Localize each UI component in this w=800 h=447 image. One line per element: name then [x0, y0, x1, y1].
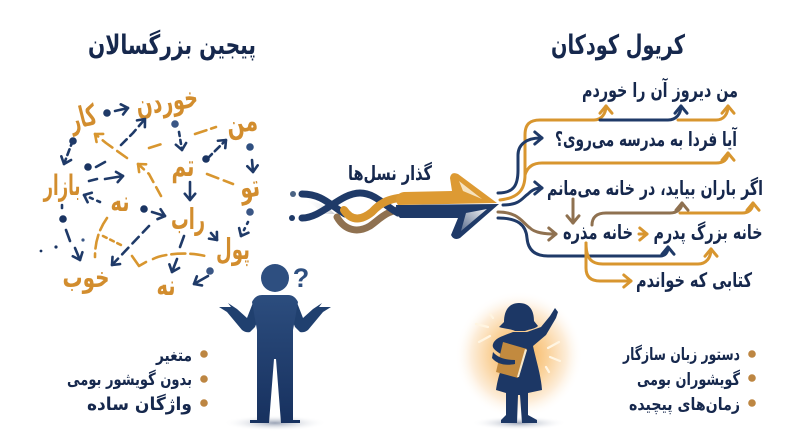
- heading: generational transition: گذار نسل‌ها: [348, 161, 432, 185]
- word cloud: [42, 80, 262, 302]
- word cloud: راب: [171, 202, 205, 236]
- creole sentences: کتابی که خواندم: [636, 268, 752, 292]
- body and arm: [493, 308, 558, 423]
- lower navy band and barb: [396, 204, 499, 239]
- bullet dots: [748, 350, 756, 407]
- light facet of gold barb: [459, 181, 482, 199]
- creole sentences: [547, 77, 763, 292]
- creole branching arrows: [498, 106, 753, 281]
- gold strand: [344, 197, 412, 218]
- ground shadow: [471, 416, 567, 430]
- panel: scattered pidgin words: [40, 80, 262, 302]
- hair: [499, 303, 538, 331]
- navy branch under fourth sentence: [498, 218, 668, 256]
- arms and hands: [219, 300, 331, 332]
- gold branch to fifth sentence: [586, 243, 631, 281]
- bullet labels: متغیر: [155, 346, 192, 366]
- word cloud: نه: [110, 185, 130, 218]
- navy branch to second sentence: [498, 138, 542, 193]
- question mark: ?: [293, 263, 309, 293]
- word cloud: من: [224, 103, 260, 141]
- figure: child with book: [455, 291, 583, 430]
- bullet labels: بدون گویشور بومی: [67, 369, 192, 390]
- gold branch under second sentence: [525, 153, 728, 175]
- bullet labels: زمان‌های پیچیده: [629, 395, 740, 415]
- bullet dots: [200, 350, 208, 407]
- light rays: [476, 314, 560, 372]
- word cloud: نه: [156, 269, 176, 302]
- brown strand: [337, 210, 398, 230]
- creole sentences: من دیروز آن را خوردم: [582, 77, 738, 102]
- list: creole traits: [622, 344, 756, 415]
- bullet labels: [67, 346, 192, 415]
- gold small arrow: [639, 232, 647, 236]
- scattered nodes: [40, 109, 254, 275]
- word cloud: کار: [64, 97, 100, 137]
- navy strands: [302, 194, 345, 214]
- book: [492, 342, 527, 378]
- head: [261, 264, 289, 292]
- title: children's creole: کریول کودکان: [551, 30, 685, 61]
- creole sentences: خانه مذره: [563, 220, 633, 244]
- ground shadow: [223, 415, 327, 431]
- word cloud: پول: [216, 232, 250, 267]
- navy dashed arrows: [62, 108, 253, 284]
- fade sheen: [305, 200, 335, 214]
- list: pidgin traits: [67, 346, 208, 415]
- gold dashed strokes: [95, 127, 233, 266]
- title: adult pidgin: پیجین بزرگسالان: [88, 29, 256, 61]
- brown branch to madhereh: [498, 212, 556, 234]
- navy branch to third sentence: [503, 188, 542, 205]
- word cloud: تو: [235, 169, 262, 207]
- start dots: [290, 191, 296, 197]
- word cloud: خوردن: [134, 80, 200, 122]
- bullet labels: دستور زبان سازگار: [622, 344, 740, 365]
- word cloud: بازار: [42, 169, 80, 202]
- bullet labels: [622, 344, 740, 415]
- sheen of lower barb: [461, 209, 487, 231]
- figure: confused adult: [219, 263, 331, 431]
- word cloud: تم: [172, 149, 194, 184]
- braided arrow: [289, 173, 499, 239]
- word cloud: خوب: [62, 261, 110, 294]
- gold branch to first sentence: [500, 106, 728, 200]
- brown and gold branch up: [592, 203, 753, 225]
- glow: [455, 291, 583, 419]
- brown down arrow: [572, 199, 574, 223]
- bullet labels: واژگان ساده: [87, 393, 192, 415]
- torso and legs: [250, 295, 300, 423]
- gold branch down to fourth sentence: [586, 243, 711, 264]
- bullet labels: گویشوران بومی: [637, 369, 740, 390]
- gold band and barb: [396, 173, 497, 205]
